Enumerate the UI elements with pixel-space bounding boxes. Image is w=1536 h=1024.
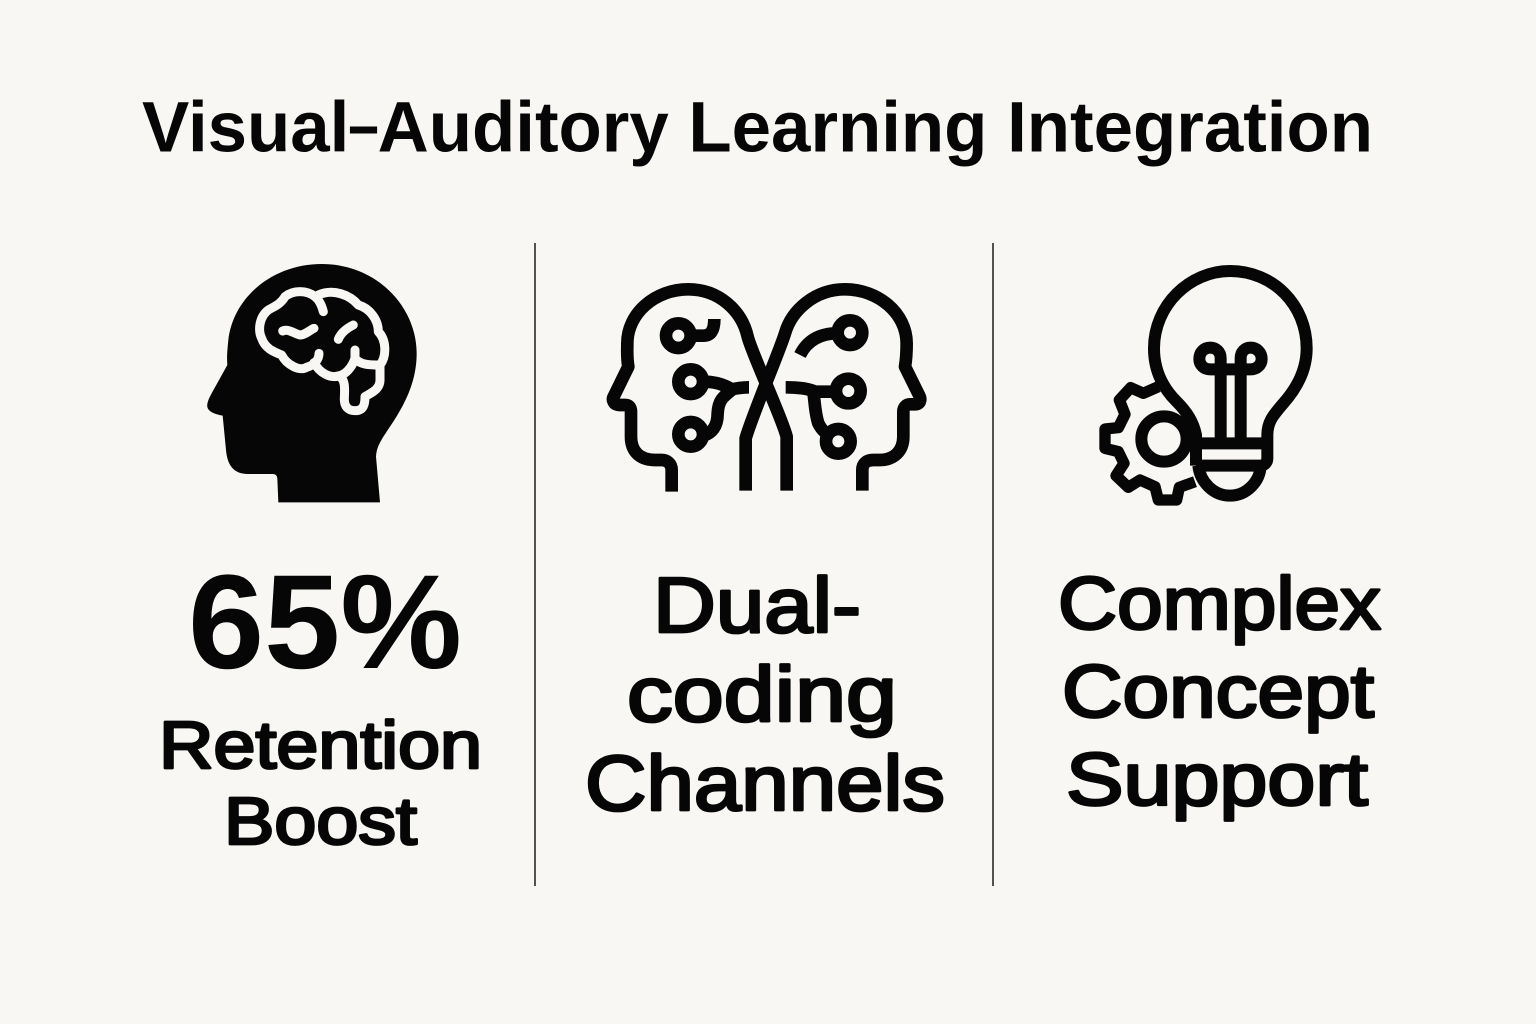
label: Dual-coding Channels: coding: [627, 650, 897, 738]
label: Retention Boost: Retention: [159, 708, 482, 783]
title: Visual: [142, 88, 350, 168]
label: Dual-coding Channels: [585, 561, 945, 827]
statistic: 65%: 65%: [188, 548, 462, 697]
icon: two heads with circuits: [613, 289, 920, 492]
panel: retention boost: [159, 264, 482, 859]
title: Auditory Learning Integration: [378, 88, 1373, 168]
label: Retention Boost: Boost: [224, 784, 417, 859]
label: Complex Concept Support: Concept: [1062, 650, 1374, 733]
title: –: [349, 98, 378, 154]
label: Dual-coding Channels: Dual-: [653, 561, 861, 649]
label: Complex Concept Support: Support: [1066, 738, 1369, 821]
label: Retention Boost: [159, 708, 482, 859]
panel: dual-coding channels: [585, 289, 945, 827]
icon: head with brain: [207, 264, 417, 502]
label: Dual-coding Channels: Channels: [585, 739, 945, 827]
label: Complex Concept Support: [1058, 562, 1381, 821]
icon: light bulb with gear: [1105, 271, 1307, 500]
label: Complex Concept Support: Complex: [1058, 562, 1381, 645]
panel: complex concept support: [1058, 271, 1381, 821]
